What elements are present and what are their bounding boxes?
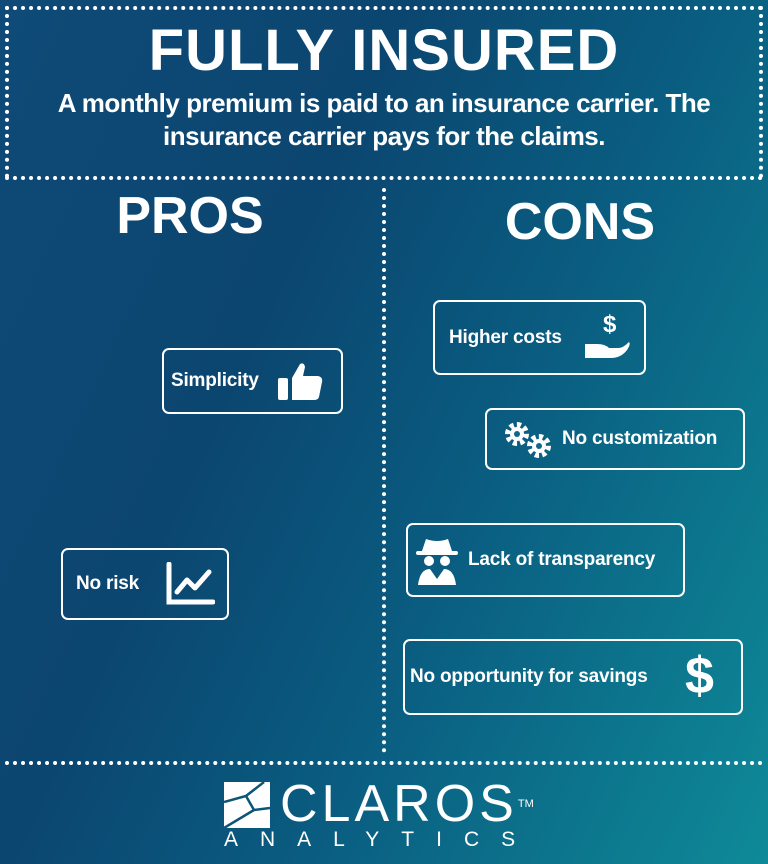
pro: no risk: No risk xyxy=(76,573,139,594)
header dotted frame xyxy=(5,6,763,178)
con: no customization xyxy=(485,408,745,470)
title: FULLY INSURED xyxy=(149,18,619,83)
con: no opportunity for savings xyxy=(403,639,743,715)
con: lack of transparency: Lack of transparency xyxy=(468,549,655,570)
logo: claros analytics: ANALYTICS xyxy=(224,828,537,851)
icon: spy xyxy=(416,539,458,585)
con: no opportunity for savings: No opportunity for savings xyxy=(410,666,648,687)
pro: no risk xyxy=(61,548,229,620)
subtitle xyxy=(58,88,710,151)
subtitle: A monthly premium is paid to an insurance carrier. The xyxy=(58,88,710,118)
con: no customization: No customization xyxy=(562,428,717,449)
icon: hand with dollar xyxy=(585,311,630,358)
icon: thumbs up xyxy=(278,363,322,400)
icon: gears xyxy=(505,422,551,458)
con: higher costs xyxy=(433,300,646,375)
subtitle: insurance carrier pays for the claims. xyxy=(163,121,605,151)
heading: cons: CONS xyxy=(505,193,655,251)
pro: simplicity: Simplicity xyxy=(171,370,259,391)
logo wordmark: CLAROSTM xyxy=(280,775,534,833)
icon: chart xyxy=(166,562,215,604)
logo: claros analytics xyxy=(224,775,537,851)
icon: hand with dollar: $ xyxy=(603,311,617,338)
con: higher costs: Higher costs xyxy=(449,326,562,348)
heading: pros: PROS xyxy=(116,187,264,245)
logo mark xyxy=(224,782,270,828)
pro: simplicity xyxy=(162,348,343,414)
con: lack of transparency xyxy=(406,523,685,597)
icon: dollar: $ xyxy=(685,647,714,705)
